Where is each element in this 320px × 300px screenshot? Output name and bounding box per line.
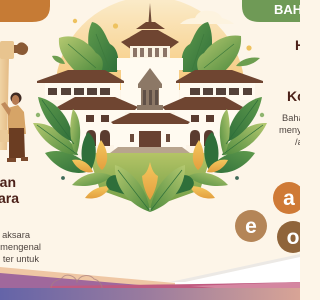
vowel e: e (245, 215, 257, 238)
cloud (180, 11, 234, 24)
left body text (0, 230, 41, 264)
blouse (8, 105, 26, 134)
vowel o: o (287, 226, 299, 249)
scroll knob (14, 42, 28, 55)
left heading (0, 174, 19, 206)
tower windows (133, 48, 167, 57)
side windows (130, 134, 170, 142)
faint cloud (51, 275, 102, 288)
sun (56, 0, 244, 90)
left body text: aksara (2, 230, 31, 240)
lower wing roof (111, 113, 190, 124)
central white body (117, 58, 183, 112)
lower leaves right (150, 97, 267, 212)
right body text (279, 113, 320, 147)
sarong (9, 128, 25, 158)
spire (148, 3, 152, 22)
centre yellow leaf (142, 162, 158, 200)
lower leaves left (33, 97, 150, 212)
top leaves left (52, 22, 118, 72)
vowel e (235, 210, 267, 242)
top leaves right (182, 22, 260, 72)
left wing (37, 70, 138, 146)
left body text: mengenal (0, 242, 41, 252)
left body text: ter untuk (3, 254, 39, 264)
arm (1, 102, 11, 116)
left heading: an (0, 174, 16, 190)
steps (110, 147, 190, 153)
scroll lower roll (0, 130, 9, 142)
hair (10, 92, 22, 104)
door (139, 131, 161, 149)
right wing (162, 70, 263, 146)
bottom ribbon (0, 254, 300, 300)
face (12, 95, 19, 105)
lower wall (114, 124, 186, 149)
grass hill (88, 153, 212, 208)
building (37, 3, 263, 153)
vowel a: a (283, 187, 295, 210)
feet (7, 157, 28, 162)
orange header panel (0, 0, 50, 22)
scroll (0, 41, 28, 150)
vowel o (277, 221, 309, 253)
woman figure (1, 92, 28, 162)
central small tower (137, 68, 163, 110)
decorative dots (36, 19, 264, 180)
tower roofs (121, 22, 179, 50)
vowel a (273, 182, 305, 214)
tower wall (130, 46, 170, 58)
green header panel (242, 0, 320, 22)
